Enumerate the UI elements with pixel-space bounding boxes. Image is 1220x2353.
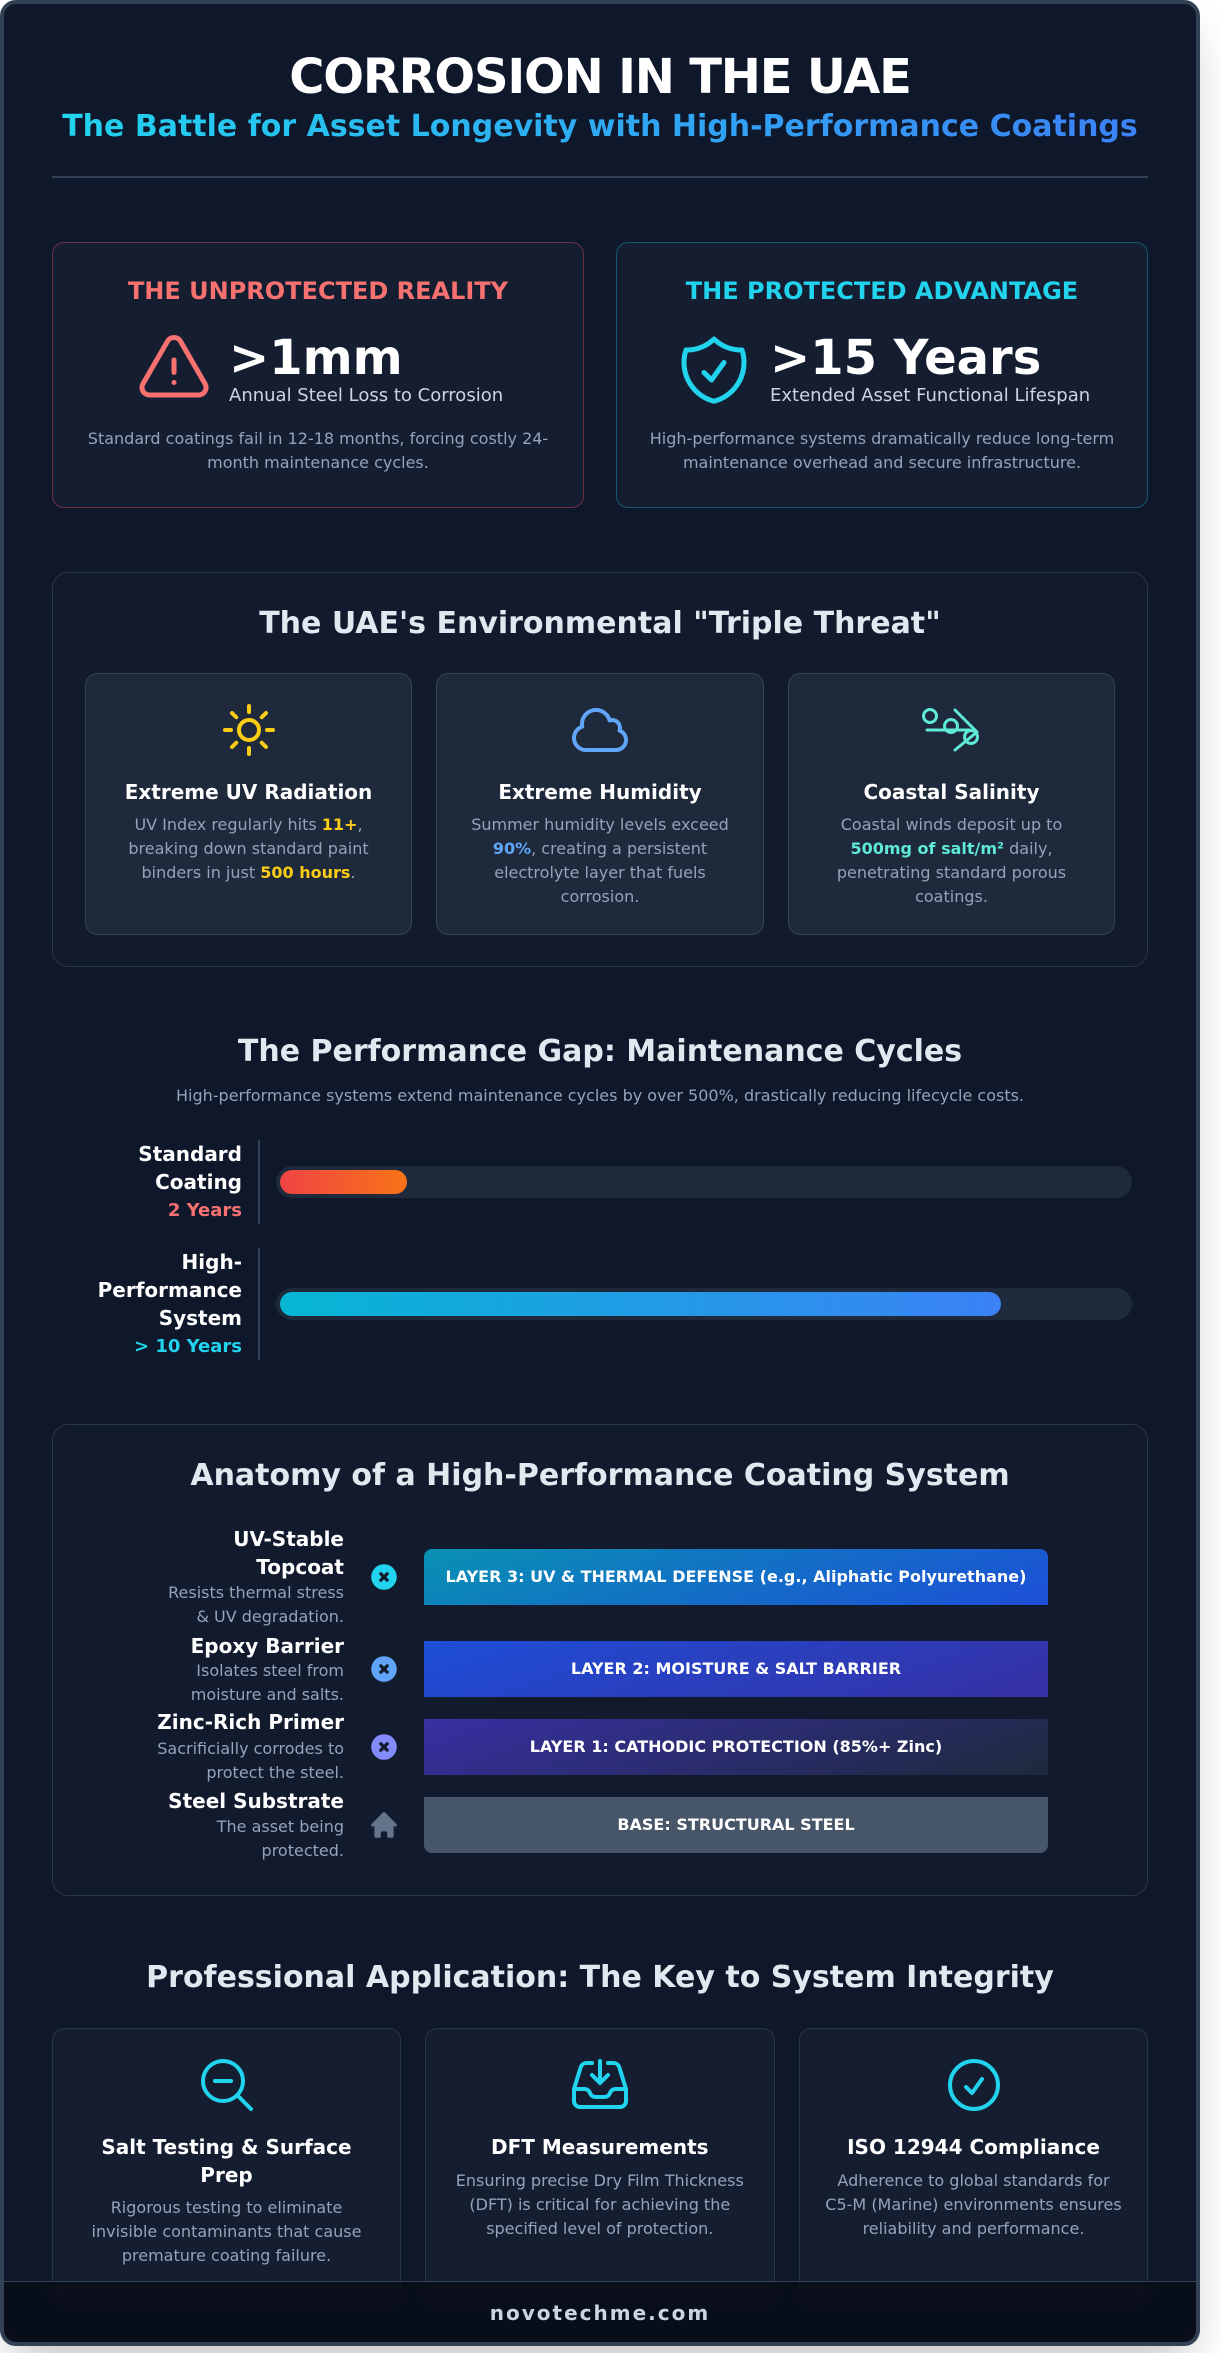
icon: cloud	[572, 708, 628, 752]
bar chart: standard coating	[138, 1140, 1132, 1224]
bar label: Performance	[98, 1278, 242, 1302]
card text: Adherence to global standards for	[837, 2171, 1110, 2190]
panel: unprotected reality	[52, 242, 584, 508]
card text: binders in just 500 hours.	[142, 863, 355, 882]
card text	[456, 2171, 744, 2238]
layer 1 bar: LAYER 1: CATHODIC PROTECTION (85%+ Zinc)	[530, 1737, 942, 1756]
layer label: epoxy: Isolates steel from	[196, 1661, 344, 1680]
card text: 500mg of salt/m² daily,	[850, 839, 1053, 858]
layer 3 bar	[424, 1549, 1048, 1605]
description: unprotected: month maintenance cycles.	[207, 453, 429, 472]
card title: DFT Measurements	[491, 2135, 709, 2159]
heading: professional application: Professional Application: The Key to System Integrity	[146, 1960, 1054, 1995]
layer 3 bar: LAYER 3: UV & THERMAL DEFENSE (e.g., Aliphatic Polyurethane)	[446, 1567, 1026, 1586]
description: protected: maintenance overhead and secure infrastructure.	[683, 453, 1081, 472]
card title: Extreme UV Radiation	[125, 780, 372, 804]
layer label: zinc: protect the steel.	[206, 1763, 344, 1782]
subtitle: The Battle for Asset Longevity with High-Performance Coatings	[62, 109, 1138, 144]
card text: corrosion.	[561, 887, 639, 906]
bar track and fill	[276, 1288, 1132, 1320]
layer label: epoxy: moisture and salts.	[191, 1685, 344, 1704]
card text: electrolyte layer that fuels	[494, 863, 706, 882]
heading: protected advantage: THE PROTECTED ADVANTAGE	[686, 277, 1078, 305]
layer label: zinc: Zinc-Rich Primer	[157, 1710, 344, 1734]
card text: (DFT) is critical for achieving the	[469, 2195, 730, 2214]
base layer bar: BASE: STRUCTURAL STEEL	[617, 1815, 855, 1834]
layer 1 bar	[424, 1719, 1048, 1775]
icon: zinc marker	[371, 1734, 397, 1760]
card text	[92, 2198, 361, 2265]
layer label: steel: protected.	[262, 1841, 344, 1860]
card text	[837, 815, 1066, 906]
layer label: topcoat: UV-Stable	[233, 1527, 344, 1551]
stat caption: lifespan: Extended Asset Functional Lifespan	[770, 385, 1090, 406]
card text: C5-M (Marine) environments ensures	[825, 2195, 1122, 2214]
card: salinity	[788, 673, 1115, 935]
icon: inbox	[572, 2059, 628, 2109]
layer label: topcoat: Resists thermal stress	[168, 1583, 344, 1602]
card text	[471, 815, 729, 906]
heading: performance gap: The Performance Gap: Maintenance Cycles	[238, 1034, 962, 1069]
card: UV radiation	[85, 673, 412, 935]
base layer bar	[424, 1797, 1048, 1853]
card: salt testing	[52, 2028, 401, 2300]
bar label: > 10 Years	[134, 1336, 242, 1357]
bar label: 2 Years	[168, 1200, 242, 1221]
heading: coating anatomy: Anatomy of a High-Performance Coating System	[190, 1458, 1010, 1493]
layer label: steel: The asset being	[217, 1817, 344, 1836]
card title: Extreme Humidity	[498, 780, 702, 804]
title: CORROSION IN THE UAE	[289, 49, 911, 105]
layer label: epoxy: Epoxy Barrier	[191, 1634, 344, 1658]
card text	[128, 815, 369, 882]
card text: UV Index regularly hits 11+,	[134, 815, 363, 834]
card title	[101, 2135, 352, 2187]
icon: steel home	[371, 1812, 397, 1838]
panel: triple threat	[52, 572, 1148, 967]
card text: Rigorous testing to eliminate	[111, 2198, 342, 2217]
card text: invisible contaminants that cause	[92, 2222, 361, 2241]
card: DFT measurements	[425, 2028, 775, 2300]
layer label: topcoat: & UV degradation.	[196, 1607, 344, 1626]
layer label: steel	[168, 1789, 344, 1860]
card text: 90%, creating a persistent	[493, 839, 707, 858]
card text: premature coating failure.	[122, 2246, 331, 2265]
footer url: novotechme.com	[490, 2301, 710, 2325]
layer 2 bar: LAYER 2: MOISTURE & SALT BARRIER	[571, 1659, 901, 1678]
stat: lifespan: >15 Years	[770, 330, 1041, 386]
icon: topcoat marker	[371, 1564, 397, 1590]
card title: Coastal Salinity	[864, 780, 1040, 804]
card: ISO compliance	[799, 2028, 1148, 2300]
layer 2 bar	[424, 1641, 1048, 1697]
description: protected: High-performance systems dramatically reduce long-term	[650, 429, 1114, 448]
layer label: steel: Steel Substrate	[168, 1789, 344, 1813]
card title: Salt Testing & Surface	[101, 2135, 352, 2159]
icon: magnifier	[201, 2059, 254, 2112]
card text: Summer humidity levels exceed	[471, 815, 729, 834]
card text: breaking down standard paint	[128, 839, 369, 858]
panel: coating anatomy	[52, 1424, 1148, 1896]
card: humidity	[436, 673, 764, 935]
bar chart: high-performance system	[98, 1248, 1132, 1360]
heading: triple threat: The UAE's Environmental "Triple Threat"	[259, 606, 941, 641]
bar label: System	[159, 1306, 242, 1330]
card text: penetrating standard porous	[837, 863, 1066, 882]
bar label	[98, 1250, 242, 1357]
description: unprotected	[88, 429, 548, 472]
card title: ISO 12944 Compliance	[847, 2135, 1100, 2159]
card text: Coastal winds deposit up to	[841, 815, 1062, 834]
card text: coatings.	[915, 887, 988, 906]
heading: unprotected reality: THE UNPROTECTED REALITY	[128, 277, 508, 305]
icon: sun	[223, 704, 275, 756]
section description: High-performance systems extend maintenance cycles by over 500%, drastically reducing lifecycle costs.	[176, 1086, 1024, 1105]
card title: Prep	[200, 2163, 253, 2187]
panel: protected advantage	[616, 242, 1148, 508]
icon: warning triangle	[139, 335, 209, 398]
stat: steel loss: >1mm	[229, 330, 403, 386]
layer label: topcoat: Topcoat	[256, 1555, 344, 1579]
stat caption: steel loss: Annual Steel Loss to Corrosion	[229, 385, 503, 406]
description: protected	[650, 429, 1114, 472]
icon: check circle	[948, 2059, 1000, 2111]
card text: Ensuring precise Dry Film Thickness	[456, 2171, 744, 2190]
icon: shield check	[682, 336, 746, 404]
card text	[825, 2171, 1122, 2238]
layer label: epoxy	[191, 1634, 344, 1704]
description: unprotected: Standard coatings fail in 12-18 months, forcing costly 24-	[88, 429, 548, 448]
bar label: Standard	[138, 1142, 242, 1166]
icon: epoxy marker	[371, 1656, 397, 1682]
bar label	[138, 1142, 242, 1221]
layer label: zinc	[157, 1710, 344, 1782]
icon: salt	[922, 708, 979, 752]
bar label: High-	[182, 1250, 242, 1274]
layer label: zinc: Sacrificially corrodes to	[157, 1739, 344, 1758]
bar track and fill	[276, 1166, 1132, 1198]
card text: specified level of protection.	[486, 2219, 713, 2238]
card text: reliability and performance.	[863, 2219, 1084, 2238]
bar label: Coating	[155, 1170, 242, 1194]
footer	[4, 2281, 1196, 2342]
layer label: topcoat	[168, 1527, 344, 1626]
